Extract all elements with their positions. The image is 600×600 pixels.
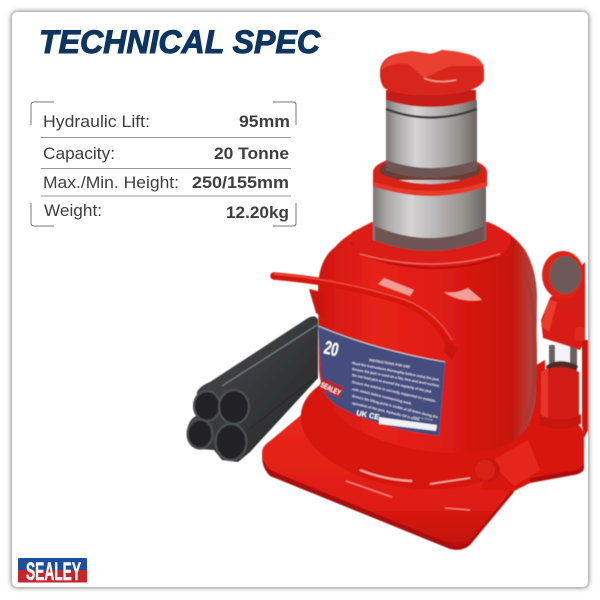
- instruction text: INSTRUCTIONS FOR USE: [369, 358, 411, 369]
- spec table: [31, 102, 296, 226]
- lower steel ram: [373, 180, 486, 253]
- jack main barrel: [318, 222, 537, 453]
- row: capacity: Capacity:: [43, 145, 115, 163]
- badge: 20: 20: [322, 337, 341, 361]
- carry handle: [274, 274, 458, 360]
- tube openings: [188, 390, 249, 460]
- badge: sealey: SEALEY: [319, 380, 342, 397]
- pump housing on base: [480, 360, 584, 491]
- row: weight: Weight:: [44, 202, 102, 220]
- table bracket corners: [31, 102, 296, 226]
- pump cylinder: [539, 340, 581, 429]
- pump lever socket: [541, 251, 588, 438]
- serial box: [379, 417, 437, 431]
- row: hydraulic lift: [43, 113, 290, 131]
- black tube handles: [187, 316, 318, 462]
- title: TECHNICAL SPEC: [39, 24, 321, 60]
- instruction text: Read the instructions thoroughly before using the jack.: [352, 361, 440, 382]
- instruction text: axle stands before commencing work.: [352, 387, 412, 406]
- instruction text: Ensure the jack is used on a flat, firm and level surface.: [352, 367, 440, 388]
- bottle jack photo illustration: [187, 50, 588, 550]
- shoulder ring: [351, 222, 511, 266]
- upper steel ram: [386, 100, 477, 178]
- sealey logo: [18, 558, 87, 586]
- instruction text: Do not load jack to exceed the capacity of the jack: [352, 373, 432, 394]
- row: height: Max./Min. Height:: [43, 174, 179, 192]
- row: weight: [44, 202, 289, 222]
- instruction text: Ensure the lifting point is visible at all times during the: [352, 394, 438, 419]
- row: weight: 12.20kg: [226, 204, 289, 222]
- base skirt: [293, 353, 531, 503]
- instruction text: Ensure the vehicle is correctly supported on suitable: [352, 380, 436, 403]
- row: capacity: [43, 145, 289, 163]
- row: capacity: 20 Tonne: [214, 145, 289, 163]
- jack base plate: [262, 395, 514, 550]
- instruction label: Made in China: [413, 415, 433, 422]
- marks: CE: UK CE: [356, 408, 380, 422]
- row: hydraulic lift: 95mm: [239, 113, 290, 131]
- instruction text: operation of the jack. Hydraulic Oil is used.: [352, 401, 420, 422]
- instruction text: [352, 358, 440, 422]
- row: height: [43, 174, 289, 192]
- sealey logo: SEALEY: [26, 558, 81, 586]
- ram collar back: [373, 154, 487, 190]
- release screw: [474, 458, 500, 482]
- row: height: 250/155mm: [192, 174, 289, 192]
- instruction label: [318, 325, 445, 436]
- row: hydraulic lift: Hydraulic Lift:: [43, 113, 150, 131]
- ram collar front: [373, 171, 487, 196]
- saddle cap: [380, 50, 484, 107]
